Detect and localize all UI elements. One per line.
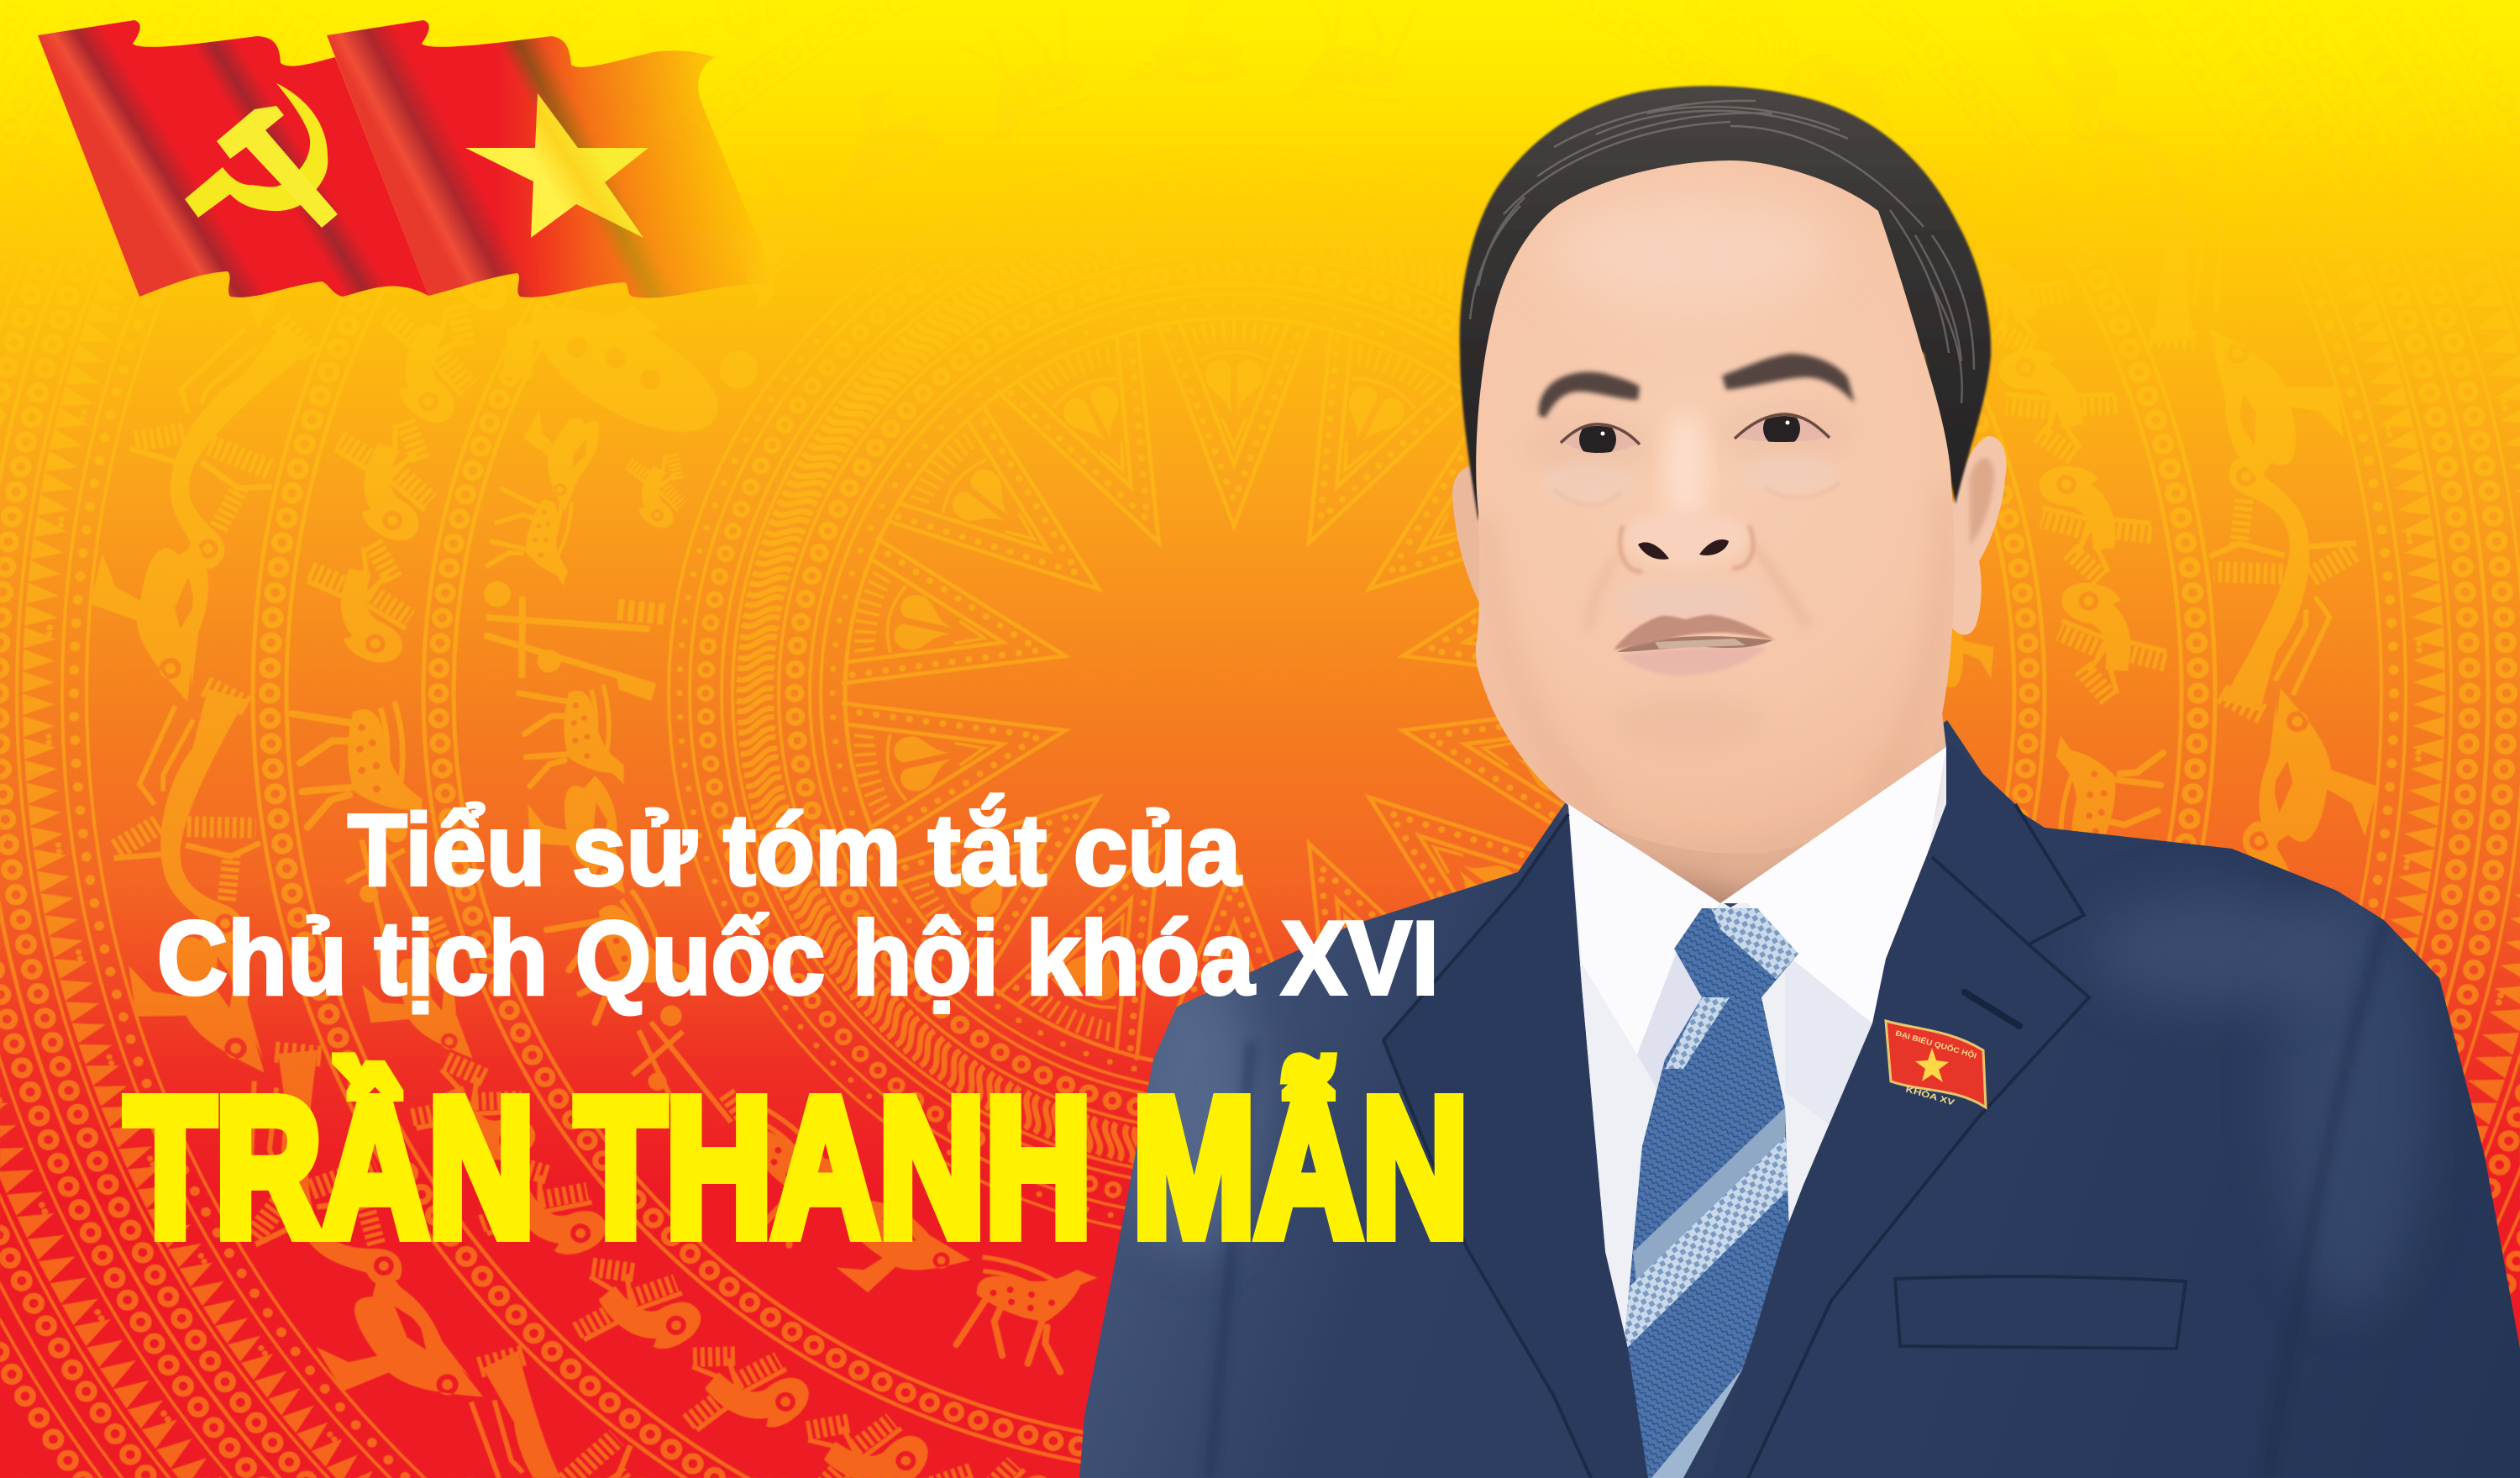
left eyebrow — [1539, 372, 1640, 418]
chin blend — [1562, 748, 1932, 891]
subtitle line 1: Tiểu sử tóm tắt của — [348, 792, 1242, 907]
nose — [1620, 509, 1753, 571]
right ear — [1949, 436, 2007, 635]
left ear — [1452, 465, 1487, 613]
subtitle line 2: Chủ tịch Quốc hội khóa XVI — [157, 901, 1439, 1017]
top glow over pattern — [0, 0, 2520, 277]
shirt — [1568, 747, 1946, 1361]
flag: hammer and sickle cloth — [38, 20, 428, 297]
hair — [1460, 86, 1991, 521]
icon: star — [465, 93, 648, 238]
national assembly pin — [1886, 1021, 1986, 1108]
pin text bottom: KHÓA XV — [1904, 1083, 1956, 1108]
right eye — [1734, 413, 1831, 442]
necktie — [1621, 908, 1798, 1478]
icon: sickle — [185, 83, 328, 218]
pin text top: ĐẠI BIỂU QUỐC HỘI — [1894, 1028, 1978, 1060]
breast pocket — [1895, 1276, 2186, 1349]
party flag — [38, 20, 777, 298]
pin star — [1915, 1048, 1949, 1082]
icon: hammer — [217, 106, 338, 228]
neck — [1562, 664, 1946, 903]
face — [1476, 160, 1955, 854]
flag: star cloth — [327, 20, 777, 298]
jacket — [1079, 720, 2520, 1478]
hair strands — [1470, 101, 1974, 403]
mouth — [1614, 615, 1776, 676]
right eyebrow — [1722, 354, 1855, 403]
title: name: TRẦN THANH MẪN — [125, 1057, 1468, 1277]
shirt collar — [1568, 747, 1946, 1126]
left eye — [1559, 423, 1641, 453]
portrait photo — [1079, 86, 2520, 1478]
jacket lapels — [1383, 739, 2089, 1478]
